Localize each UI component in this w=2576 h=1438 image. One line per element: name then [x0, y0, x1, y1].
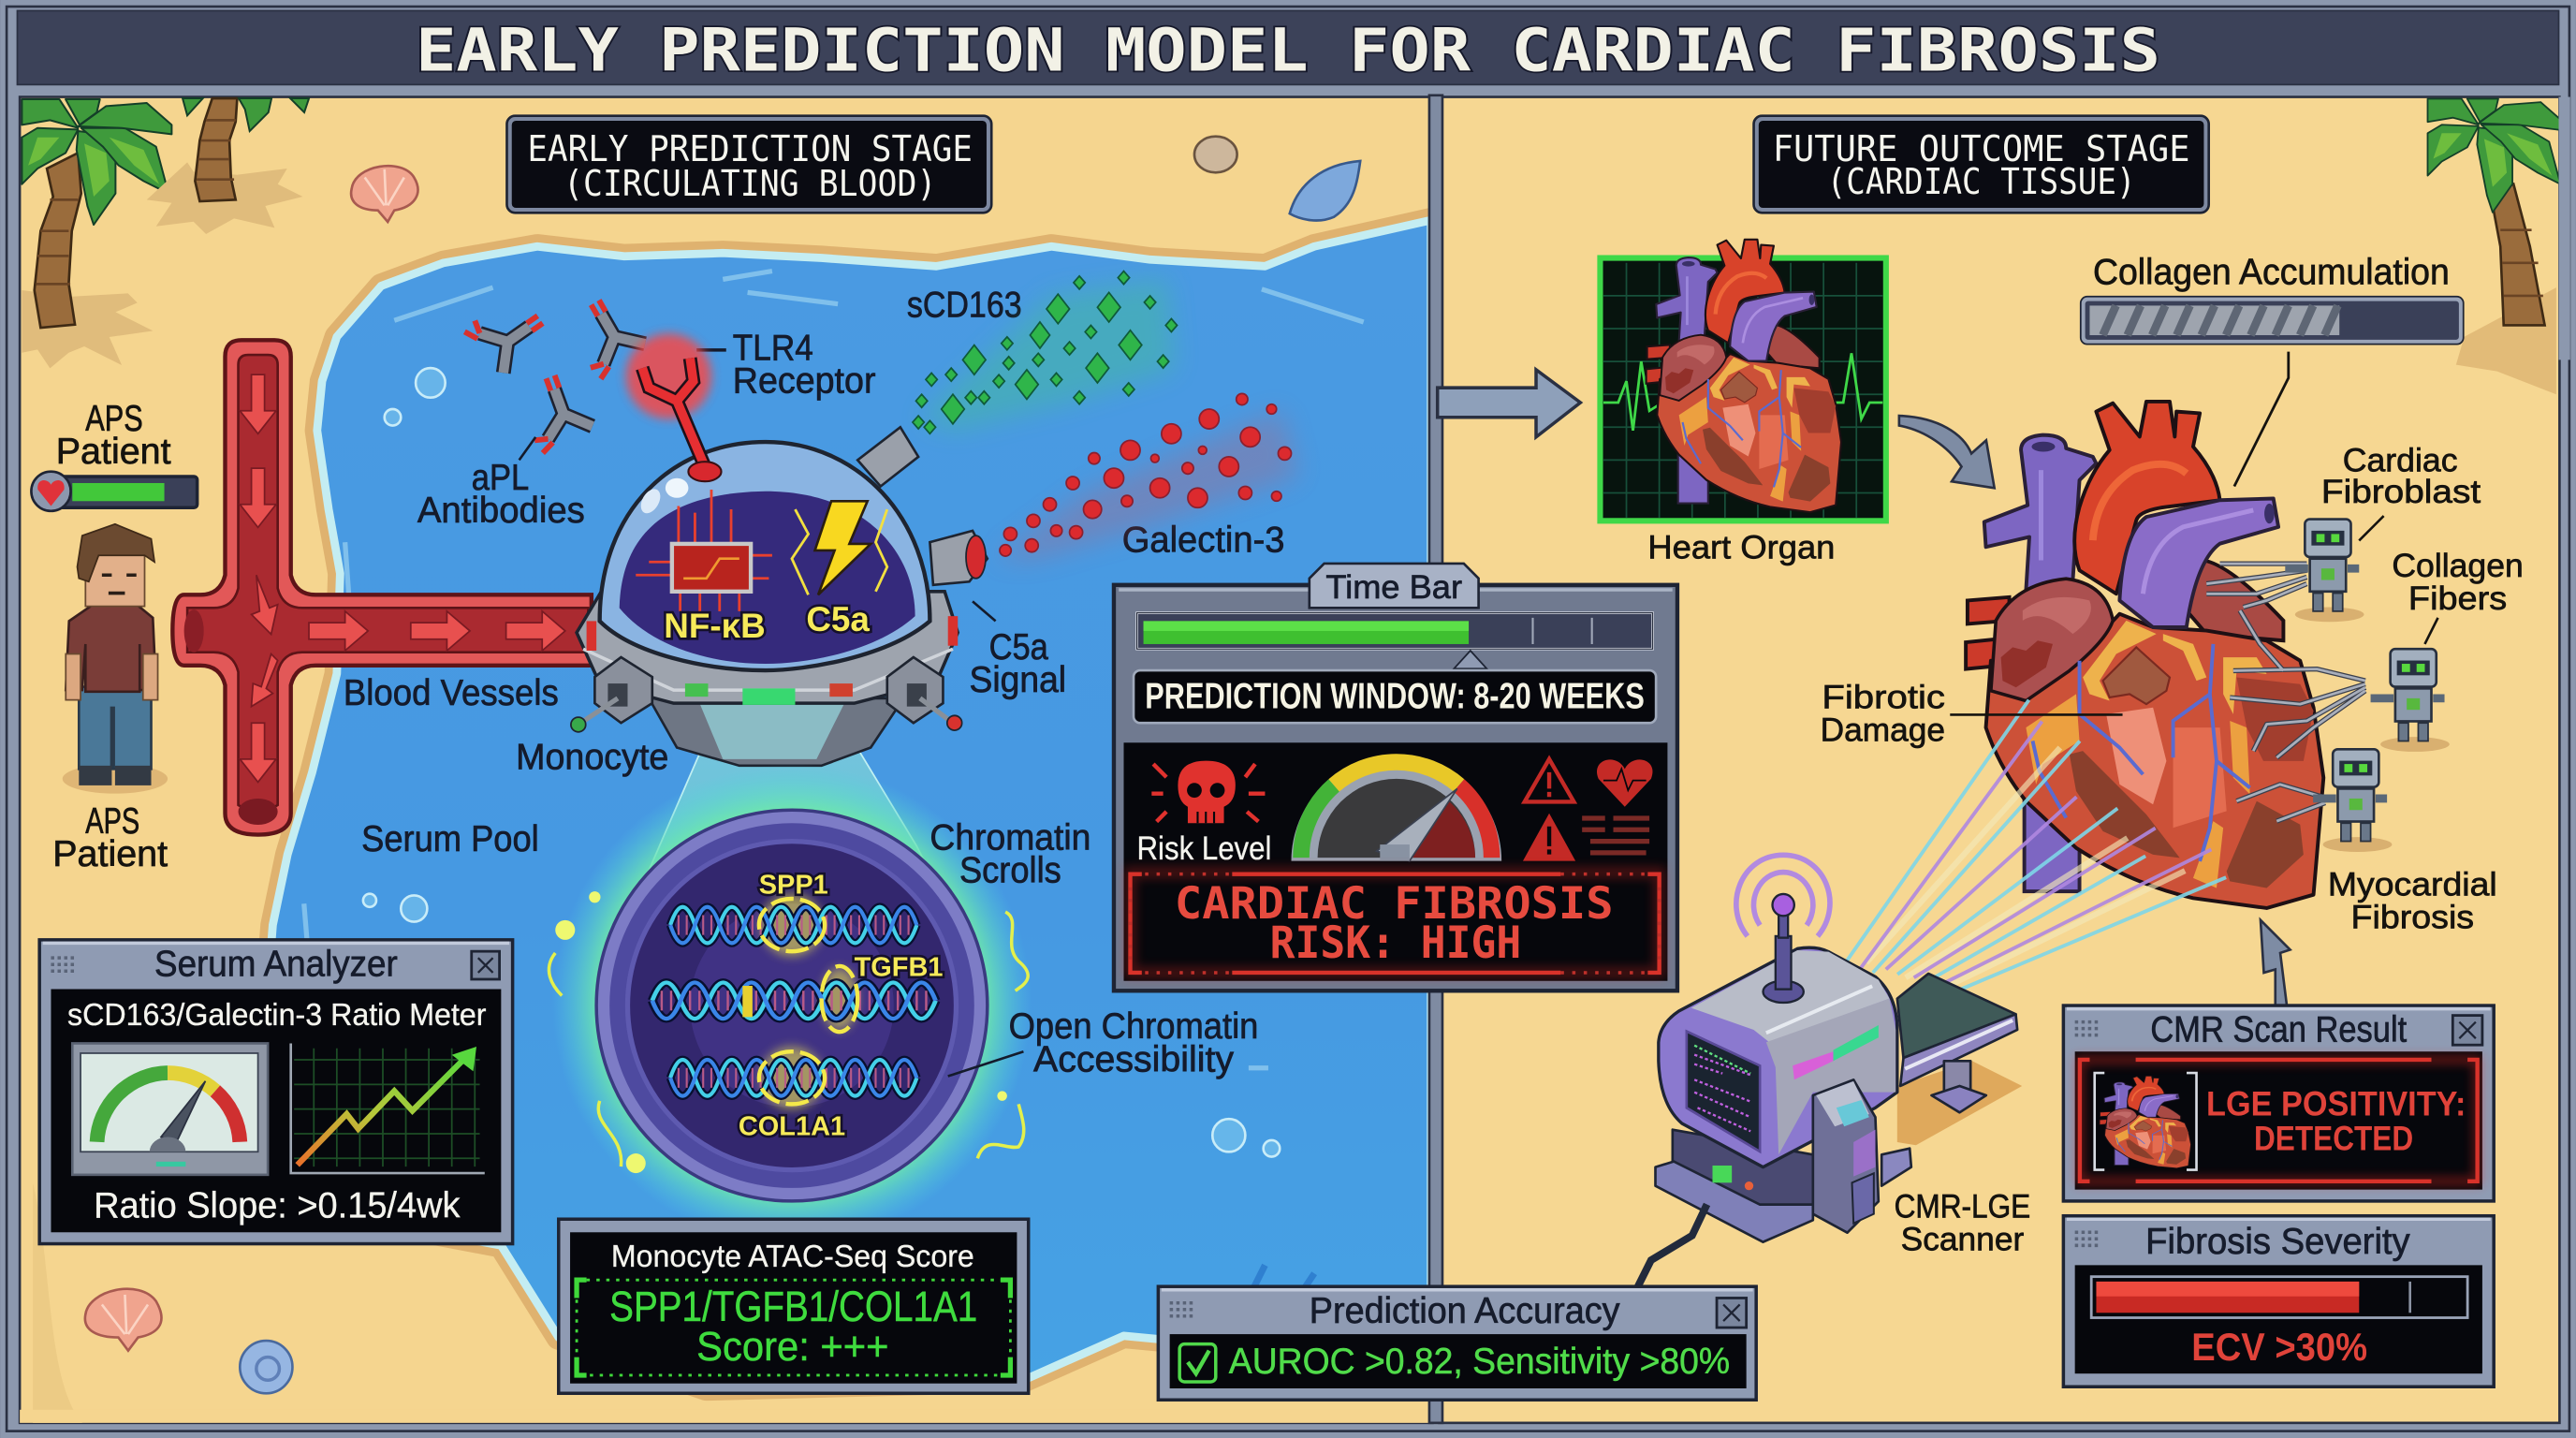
icon: blue spiral shell	[240, 1341, 292, 1393]
panel: CMR scan result: DETECTED	[2254, 1120, 2413, 1158]
ATAC heading: Monocyte ATAC-Seq Score	[611, 1240, 974, 1274]
icon: tan shell	[1194, 137, 1237, 172]
label: CMR-LGE scanner: CMR-LGE	[1895, 1188, 2030, 1225]
label: chromatin scrolls: Scrolls	[959, 850, 1061, 890]
NF-kB chip	[636, 490, 772, 611]
label: chromatin scrolls	[929, 817, 1090, 890]
icon: palm tree second	[147, 98, 309, 234]
header: early prediction stage: EARLY PREDICTION STAGE	[527, 128, 973, 170]
icon: warning solid	[1523, 814, 1575, 861]
engines	[594, 657, 652, 723]
label: C5a signal: C5a	[989, 627, 1048, 668]
icon: bubbles	[363, 368, 1280, 1157]
heart organ monitor	[1600, 240, 1886, 521]
label: open chromatin accessibility	[948, 1006, 1258, 1079]
arrows in vessel	[240, 374, 565, 782]
icon: patient health bar	[31, 472, 198, 511]
ratio trend chart	[291, 1043, 485, 1173]
label: heart organ: Heart Organ	[1647, 530, 1835, 566]
risk callout	[1131, 873, 1660, 973]
label: collagen accumulation: Collagen Accumulation	[2093, 253, 2450, 293]
LGE result: LGE POSITIVITY:	[2206, 1085, 2466, 1123]
header: early prediction stage	[506, 116, 991, 213]
time bar tab	[1310, 564, 1479, 608]
label: risk level: Risk Level	[1137, 830, 1271, 867]
gene score: SPP1/TGFB1/COL1A1	[609, 1283, 977, 1330]
TLR4 receptor	[626, 333, 722, 481]
open chromatin highlights	[759, 899, 857, 1104]
gauge	[72, 1043, 268, 1175]
label: fibrotic damage: Fibrotic	[1822, 679, 1945, 715]
meter heading: sCD163/Galectin-3 Ratio Meter	[67, 998, 487, 1033]
prediction window	[1134, 670, 1656, 723]
label: collagen fibers: Fibers	[2408, 580, 2507, 617]
scan thumbnail	[2095, 1073, 2197, 1170]
label: cardiac fibroblast: Fibroblast	[2321, 474, 2481, 510]
blood vessels	[172, 340, 592, 835]
nucleus with chromatin: COL1A1	[739, 1112, 845, 1142]
label: TLR4 receptor: Receptor	[733, 360, 876, 401]
table conveyor	[1897, 974, 2017, 1112]
collagen fibers and fibroblast bots	[2206, 520, 2450, 852]
label: TLR4 receptor	[696, 328, 876, 401]
fibroblast bot 2	[2371, 649, 2450, 752]
icon: blue shell	[1290, 161, 1360, 220]
scan beams	[1847, 700, 2226, 992]
label: APS Patient top: Patient	[56, 432, 171, 472]
prediction window: PREDICTION WINDOW: 8-20 WEEKS	[1145, 676, 1645, 716]
nucleus with chromatin: TGFB1	[855, 952, 943, 982]
header: future outcome stage: (CARDIAC TISSUE)	[1827, 161, 2136, 203]
risk gauge	[1292, 756, 1501, 861]
accuracy text: AUROC >0.82, Sensitivity >80%	[1229, 1342, 1730, 1382]
label: collagen fibers: Collagen	[2392, 548, 2524, 584]
check icon	[1179, 1344, 1216, 1382]
open chromatin glow	[761, 894, 857, 1109]
label: CMR-LGE scanner	[1895, 1188, 2030, 1258]
score value: Score: +++	[696, 1324, 889, 1370]
panel: serum analyzer	[39, 940, 513, 1244]
fibroblast bot 1	[2285, 520, 2364, 622]
cannons	[857, 427, 918, 486]
label: open chromatin accessibility: Accessibility	[1033, 1039, 1235, 1079]
icon: skull	[1151, 761, 1265, 823]
CMR-LGE scanner	[1656, 855, 2022, 1242]
glowing sparks around nucleus	[549, 891, 1028, 1173]
label: NF-kB: NF-κB	[664, 607, 766, 645]
arrow: curved to fibrotic heart	[1899, 416, 1995, 488]
label: serum pool: Serum Pool	[361, 819, 539, 859]
ECV value: ECV >30%	[2191, 1325, 2367, 1369]
label: cardiac fibroblast: Cardiac	[2343, 443, 2458, 479]
arrow: centre to heart organ	[1438, 370, 1580, 437]
label: cardiac fibroblast	[2321, 443, 2481, 540]
scanner body	[1659, 947, 1897, 1167]
title: Prediction Accuracy	[1310, 1291, 1620, 1331]
label: C5a signal	[970, 601, 1066, 700]
monocyte spacecraft	[571, 427, 988, 766]
title: CMR Scan Result	[2150, 1010, 2407, 1050]
sCD163 green particles	[913, 271, 1178, 433]
leader: collagen to heart	[2234, 352, 2289, 486]
panel title: Serum Analyzer	[154, 944, 398, 984]
panel: prediction accuracy	[1158, 1286, 1756, 1400]
label: aPL antibodies	[417, 437, 585, 531]
close button	[1717, 1298, 1747, 1328]
icon: pink shell bottom	[85, 1289, 161, 1351]
label: APS Patient top	[56, 399, 171, 472]
C5a lightning	[792, 501, 887, 594]
label: TLR4 receptor: TLR4	[733, 328, 813, 368]
fibrotic heart	[1966, 402, 2323, 908]
label: myocardial fibrosis: Fibrosis	[2351, 900, 2474, 936]
title: EARLY PREDICTION MODEL FOR CARDIAC FIBROSIS	[416, 15, 2160, 84]
icon: damaged heart	[1597, 759, 1653, 807]
label: APS Patient bottom	[52, 801, 168, 874]
Galectin-3 red particles	[994, 393, 1298, 559]
label: chromatin scrolls: Chromatin	[929, 817, 1090, 858]
risk callout: RISK: HIGH	[1270, 917, 1521, 969]
hull	[649, 698, 903, 766]
antenna	[1736, 855, 1830, 1003]
panel: monocyte ATAC-seq score	[559, 1219, 1029, 1393]
risk callout: CARDIAC FIBROSIS	[1175, 878, 1613, 930]
icon: patient figure	[63, 524, 168, 794]
header: early prediction stage: (CIRCULATING BLOOD)	[564, 163, 936, 205]
arrow: scan result up to heart	[2261, 920, 2291, 1005]
label: C5a signal: Signal	[970, 660, 1066, 700]
label: fibrotic damage	[1821, 679, 2123, 749]
label: APS Patient bottom: Patient	[52, 834, 168, 874]
title: Fibrosis Severity	[2145, 1222, 2410, 1262]
serum pool water	[263, 220, 1431, 1388]
fibroblast bot 3	[2313, 749, 2392, 852]
label: fibrotic damage: Damage	[1821, 712, 1945, 749]
scanner cable	[1638, 1204, 1707, 1286]
close button	[472, 951, 500, 979]
time progress bar	[1137, 613, 1653, 668]
centre divider	[1429, 95, 1442, 1423]
DNA strands	[670, 907, 916, 943]
label: open chromatin accessibility: Open Chromatin	[1009, 1006, 1258, 1047]
gene labels: SPP1	[759, 871, 828, 901]
label: CMR-LGE scanner: Scanner	[1901, 1222, 2025, 1258]
aPL antibodies	[462, 289, 650, 454]
red frame	[2080, 1060, 2478, 1181]
header: future outcome stage: FUTURE OUTCOME STAGE	[1773, 128, 2190, 170]
scanner shadow	[1897, 1061, 2022, 1145]
icon: pink shell top	[351, 166, 417, 222]
panel: early prediction stage background (sand and serum pool)	[20, 97, 1432, 1423]
label: C5a: C5a	[806, 600, 870, 638]
label: APS Patient bottom: APS	[85, 801, 139, 842]
time bar tab: Time Bar	[1325, 569, 1462, 606]
icon: palm tree left	[22, 99, 171, 368]
collagen progress bar	[2081, 297, 2464, 345]
label: aPL antibodies: Antibodies	[417, 491, 585, 531]
beam from monocyte to nucleus	[600, 651, 986, 986]
label: Galectin-3: Galectin-3	[1122, 521, 1284, 561]
dotted frame	[577, 1280, 1010, 1375]
severity bar	[2091, 1277, 2467, 1318]
icon: warning outline	[1525, 759, 1573, 801]
status light bar	[1793, 1025, 1879, 1079]
label: aPL antibodies: aPL	[472, 458, 529, 498]
ratio slope value: Ratio Slope: >0.15/4wk	[94, 1185, 461, 1225]
label: myocardial fibrosis: Myocardial	[2328, 866, 2497, 902]
glass dome	[600, 442, 929, 670]
small readout	[1582, 818, 1649, 853]
label: monocyte: Monocyte	[516, 737, 668, 777]
label: collagen fibers	[2392, 548, 2524, 644]
panel: CMR scan result	[2063, 1005, 2494, 1201]
nucleus with chromatin	[552, 764, 1032, 1244]
header: future outcome stage	[1754, 116, 2209, 213]
base ring	[577, 592, 958, 703]
close button	[2452, 1016, 2482, 1045]
base	[1656, 1130, 1911, 1242]
panel: future outcome stage background	[1439, 97, 2559, 1423]
console	[1813, 1079, 1879, 1233]
dome interior	[620, 492, 915, 664]
collagen fibers	[2206, 564, 2365, 821]
panel: fibrosis severity	[2063, 1216, 2494, 1387]
label: blood vessels: Blood Vessels	[344, 673, 559, 713]
label: sCD163: sCD163	[907, 286, 1022, 326]
screen	[1687, 1032, 1760, 1152]
panel: time bar and risk	[1114, 564, 1677, 990]
label: myocardial fibrosis	[2328, 866, 2497, 936]
label: APS Patient top: APS	[85, 399, 143, 439]
icon: palm tree right	[2427, 97, 2570, 394]
